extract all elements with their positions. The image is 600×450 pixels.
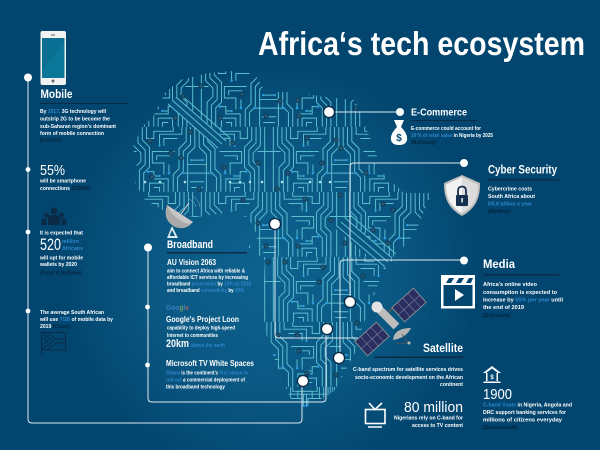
panel: broadband [144,196,254,390]
text: TV White Spaces: Microsoft TV White Spaces [166,359,254,368]
logo: Google: Google [166,303,189,312]
diagonal trace bundles [168,94,396,268]
text: C-band VSATs: C-band Vsats in Nigeria, Angola and [483,402,573,408]
text: South Africa data: 2019 (Cisco) [40,324,70,330]
icon: clapperboard [441,275,475,308]
text: cyber security [488,186,535,215]
stat: 80 million: 80 million [404,399,463,416]
text: 3G statement: By 2017, 3G technology will [40,109,106,115]
text: TV White Spaces: this broadband technology [166,384,226,390]
text: South Africa data [39,310,114,330]
text: 3G statement [40,109,116,144]
stat: 1900: 1900 [483,386,512,403]
equator dot row [144,181,331,183]
panel: media [441,256,563,319]
text: C-band VSATs: DRC support banking services for [483,410,567,416]
icon: bank: $ [490,375,494,381]
text: Project Loon: Google's Project Loon [166,315,239,324]
text: South Africa data: The average South African [40,310,105,316]
heading: Satellite: Satellite [423,343,463,355]
text: TV White Spaces: Ghana is the continent's first nation to [166,370,248,376]
map: circuit-board Africa [134,71,430,407]
text: C-band VSATs: millions of citizens everyday [483,418,563,424]
icon: smartphone [40,31,66,85]
text: e-commerce: E-commerce could account for [411,126,482,132]
text: cyber security: Cybercrime costs [488,186,532,192]
stat: 55% [39,162,90,192]
heading: Broadband: Broadband [167,239,213,251]
stat: 520 million: wallets by 2020 [39,262,77,268]
text: Project Loon: 20km [166,338,189,350]
stat: 520 million: 520 [40,235,61,254]
text: cyber security: R5.8 billion a year [488,202,533,208]
text: e-commerce: (McKinsey) [411,140,436,146]
text: 3G statement: form of mobile connection [40,131,105,137]
text: media: Africa's online video [483,282,538,288]
text: e-commerce: 10 % of retail sales in Nigeria by 2025 [411,133,493,139]
text: AU Vision 2063 [167,258,251,294]
stat: 520 million: will opt for mobile [39,256,83,262]
map junction nodes [269,106,356,387]
text: C-band VSATs [483,402,573,431]
icon: television [366,403,385,427]
stat: 520 million: Africans [62,246,83,252]
icon: satellite dish [166,196,200,238]
text: South Africa data: will use 7GB of mobile data by [39,317,114,323]
text: AU Vision 2063: and broadband connectivity by 20% [167,288,244,294]
heading: Mobile: Mobile [40,89,72,101]
text: media [483,282,563,319]
timeline node: e-commerce [396,108,404,116]
connector lines [28,77,464,423]
text: AU Vision 2063: aim to connect Africa with reliable & [167,268,245,274]
timeline node: cyber security [460,159,468,167]
stat: 80 million: Nigerians rely on C-band for [394,416,464,422]
text: Project Loon: above the earth [191,343,225,349]
text: TV White Spaces [166,359,254,390]
text: satellite: socio-economic development on the African [355,375,464,381]
stat: 80 million: access to TV content [412,423,463,429]
text: AU Vision 2063: broadband penetration by 10% by 2018 [167,282,251,288]
text: Project Loon [166,315,239,350]
heading: Media: Media [483,257,515,271]
text: 3G statement: (Ericsson) [40,138,61,144]
stat: 520 million: million [62,239,80,245]
text: Project Loon: capability to deploy high-speed [167,326,235,332]
text: cyber security: South Africa about [488,194,535,200]
text: AU Vision 2063: affordable ICT services by increasing [167,275,248,281]
stat: 520 million: (Frost & Sullivan) [40,270,82,276]
icon: money bag: $ [396,133,402,144]
text: satellite: continent [440,382,463,388]
text: e-commerce [411,126,493,146]
text: satellite: C-band spectrum for satellite services drives [353,367,463,373]
heading: E-Commerce: E-Commerce [411,106,467,118]
text: C-band VSATs: (Euroconsult) [483,425,517,431]
text: 3G statement: sub-Saharan region's dominant [40,124,116,130]
timeline node: media [460,256,468,264]
stat: 55%: connections (GSMA) [40,186,90,192]
panel: C-band VSATs [483,366,573,431]
text: media: (Ericsson) [483,313,510,319]
text: media: increase by 55% per year until [483,298,563,304]
text: 3G statement: outstrip 2G to be become the [40,116,110,122]
text: cyber security: (McAfee) [488,209,510,215]
stat: 80 million [394,399,464,429]
stat: 520 million: It is expected that [40,230,83,236]
stat: 55%: 55% [40,162,65,179]
text: satellite [353,367,464,388]
text: Project Loon: Internet to communities [167,333,218,339]
icon: group of people [42,208,66,225]
icon: shield with padlock [444,175,480,216]
stat: 520 million [39,230,83,276]
panel: e-commerce [391,106,493,146]
text: media: consumption is expected to [483,290,558,296]
ring nodes [148,84,395,377]
timeline node: mobile [24,74,32,313]
icon: South African flag [42,332,66,356]
stat: 55%: will be smartphone [39,178,86,184]
text: AU Vision 2063: AU Vision 2063 [167,258,216,267]
heading: Cyber Security: Cyber Security [488,162,557,176]
timeline node: broadband [144,244,152,367]
icon: satellite [355,288,426,356]
panel: satellite [353,288,464,429]
text: TV White Spaces: roll-out a commercial deployment of [166,378,245,384]
panel: mobile [24,31,128,356]
text: media: the end of 2019 [483,305,524,311]
panel: cyber security [444,159,559,216]
